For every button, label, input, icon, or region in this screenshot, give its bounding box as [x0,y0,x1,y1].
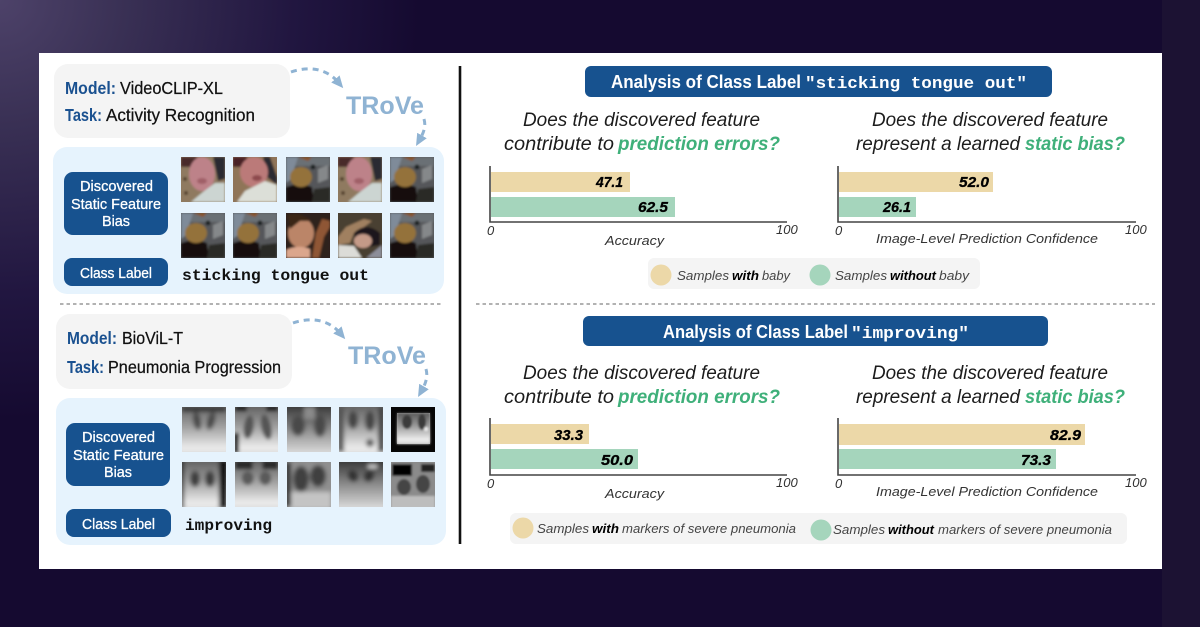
bar chart: accuracy (top): 62.5 [638,199,669,216]
thumbnails: chest X-rays [178,403,439,511]
heading: analysis of sticking tongue out: Analysis of Class Label [611,72,801,92]
badge: Discovered Static Feature Bias: Discovered [82,429,155,446]
panel: discovered bias, chest X-ray [56,398,446,545]
panel: discovered bias, baby [53,147,444,294]
question: prediction errors (top) [504,110,780,155]
panel: BioViL-T model card [56,314,292,389]
panel: BioViL-T model card: BioViL-T [122,328,183,348]
heading: analysis of sticking tongue out [585,66,1052,97]
bar chart: confidence (top): 0 [835,223,843,238]
heading: analysis of improving: "improving" [851,325,969,344]
badge: Class Label [64,258,168,286]
badge: Discovered Static Feature Bias [66,423,170,486]
bar chart: accuracy (bottom) [487,418,798,501]
question: prediction errors (bottom): contribute to [504,387,614,408]
heading: analysis of improving [583,316,1048,346]
bar chart: accuracy (top): 0 [487,223,495,238]
bar chart: confidence (top): 26.1 [882,199,911,216]
bar chart: accuracy (top): Accuracy [604,233,666,248]
bar chart: accuracy (bottom): 0 [487,476,495,491]
bar chart: confidence (bottom): Image-Level Prediction Confidence [876,484,1098,499]
panel: BioViL-T model card: Task: [67,357,104,377]
badge: Class Label [66,509,171,537]
bar chart: confidence (top) [835,166,1147,246]
legend: severe pneumonia: Samples [833,522,886,537]
panel: BioViL-T model card: Pneumonia Progression [108,357,281,377]
legend: baby: with [732,268,759,283]
class label text: sticking tongue out [182,267,369,285]
question: static bias (bottom): Does the discovered feature [872,363,1108,384]
panel: VideoCLIP-XL model card: Activity Recognition [106,105,255,125]
panel: BioViL-T model card: Model: [67,328,117,348]
question: static bias (top): represent a learned [856,134,1021,155]
bar chart: confidence (top): Image-Level Prediction Confidence [876,231,1098,246]
legend: severe pneumonia: without [888,522,935,537]
legend: severe pneumonia: markers of severe pneumonia [622,521,796,536]
bar chart: accuracy (top): 47.1 [595,174,623,191]
question: static bias (top) [856,110,1125,155]
TRoVe label (top): TRoVe [346,92,424,120]
legend: severe pneumonia: with [592,521,619,536]
panel: VideoCLIP-XL model card: Model: [65,78,116,98]
bar chart: confidence (bottom): 82.9 [1050,427,1082,444]
bar chart: confidence (top): 52.0 [959,174,990,191]
bar chart: confidence (bottom) [835,418,1147,499]
legend: severe pneumonia: Samples [537,521,590,536]
question: prediction errors (top): Does the discovered feature [523,110,760,131]
legend: baby [648,258,980,289]
question: static bias (top): static bias? [1025,134,1125,155]
panel: VideoCLIP-XL model card: VideoCLIP-XL [120,78,223,98]
panel: VideoCLIP-XL model card: Task: [65,105,102,125]
class label text: improving [185,517,272,535]
question: prediction errors (bottom): prediction errors? [617,387,780,408]
arrow: TRoVe to results (bottom) [422,369,427,390]
arrow: TRoVe to results (top) [420,119,425,139]
bar chart: accuracy (bottom): 100 [776,475,798,490]
question: static bias (bottom): static bias? [1025,387,1125,408]
heading: analysis of improving: Analysis of Class Label [663,322,848,342]
legend: baby: Samples [835,268,888,283]
bar chart: accuracy (bottom): 33.3 [554,427,584,444]
white figure panel [39,53,1162,569]
legend: severe pneumonia: markers of severe pneumonia [938,522,1112,537]
question: static bias (top): Does the discovered feature [872,110,1108,131]
bar chart: confidence (top): 100 [1125,222,1147,237]
legend: baby: baby [762,268,791,283]
badge: Discovered Static Feature Bias: Bias [102,213,130,230]
bar chart: confidence (bottom): 100 [1125,475,1147,490]
question: prediction errors (bottom): Does the discovered feature [523,363,760,384]
question: static bias (bottom): represent a learned [856,387,1021,408]
legend: baby: without [890,268,937,283]
legend: baby: Samples [677,268,730,283]
bar chart: accuracy (top): 100 [776,222,798,237]
badge: Discovered Static Feature Bias: Discovered [80,178,153,195]
bar chart: confidence (bottom): 73.3 [1021,452,1052,469]
thumbnails: baby images [181,157,434,258]
badge: Class Label: Class Label [80,265,152,282]
bar chart: accuracy (bottom): Accuracy [604,486,666,501]
arrow: model to TRoVe (top) [291,69,338,82]
question: static bias (bottom) [856,363,1125,408]
bar chart: confidence (bottom): 0 [835,476,843,491]
arrow: model to TRoVe (bottom) [293,320,340,333]
legend: baby: baby [939,268,971,283]
question: prediction errors (top): prediction errors? [617,134,780,155]
panel: VideoCLIP-XL model card [54,64,290,138]
badge: Class Label: Class Label [82,516,155,533]
question: prediction errors (top): contribute to [504,134,614,155]
bar chart: accuracy (bottom): 50.0 [601,452,634,469]
badge: Discovered Static Feature Bias: Static Feature [73,447,164,464]
legend: severe pneumonia [510,513,1127,544]
question: prediction errors (bottom) [504,363,780,408]
TRoVe label (bottom): TRoVe [348,342,426,370]
bar chart: accuracy (top) [487,166,798,248]
badge: Discovered Static Feature Bias: Bias [104,464,132,481]
badge: Discovered Static Feature Bias: Static Feature [71,196,161,213]
heading: analysis of sticking tongue out: "sticking tongue out" [805,75,1027,94]
badge: Discovered Static Feature Bias [64,172,168,235]
